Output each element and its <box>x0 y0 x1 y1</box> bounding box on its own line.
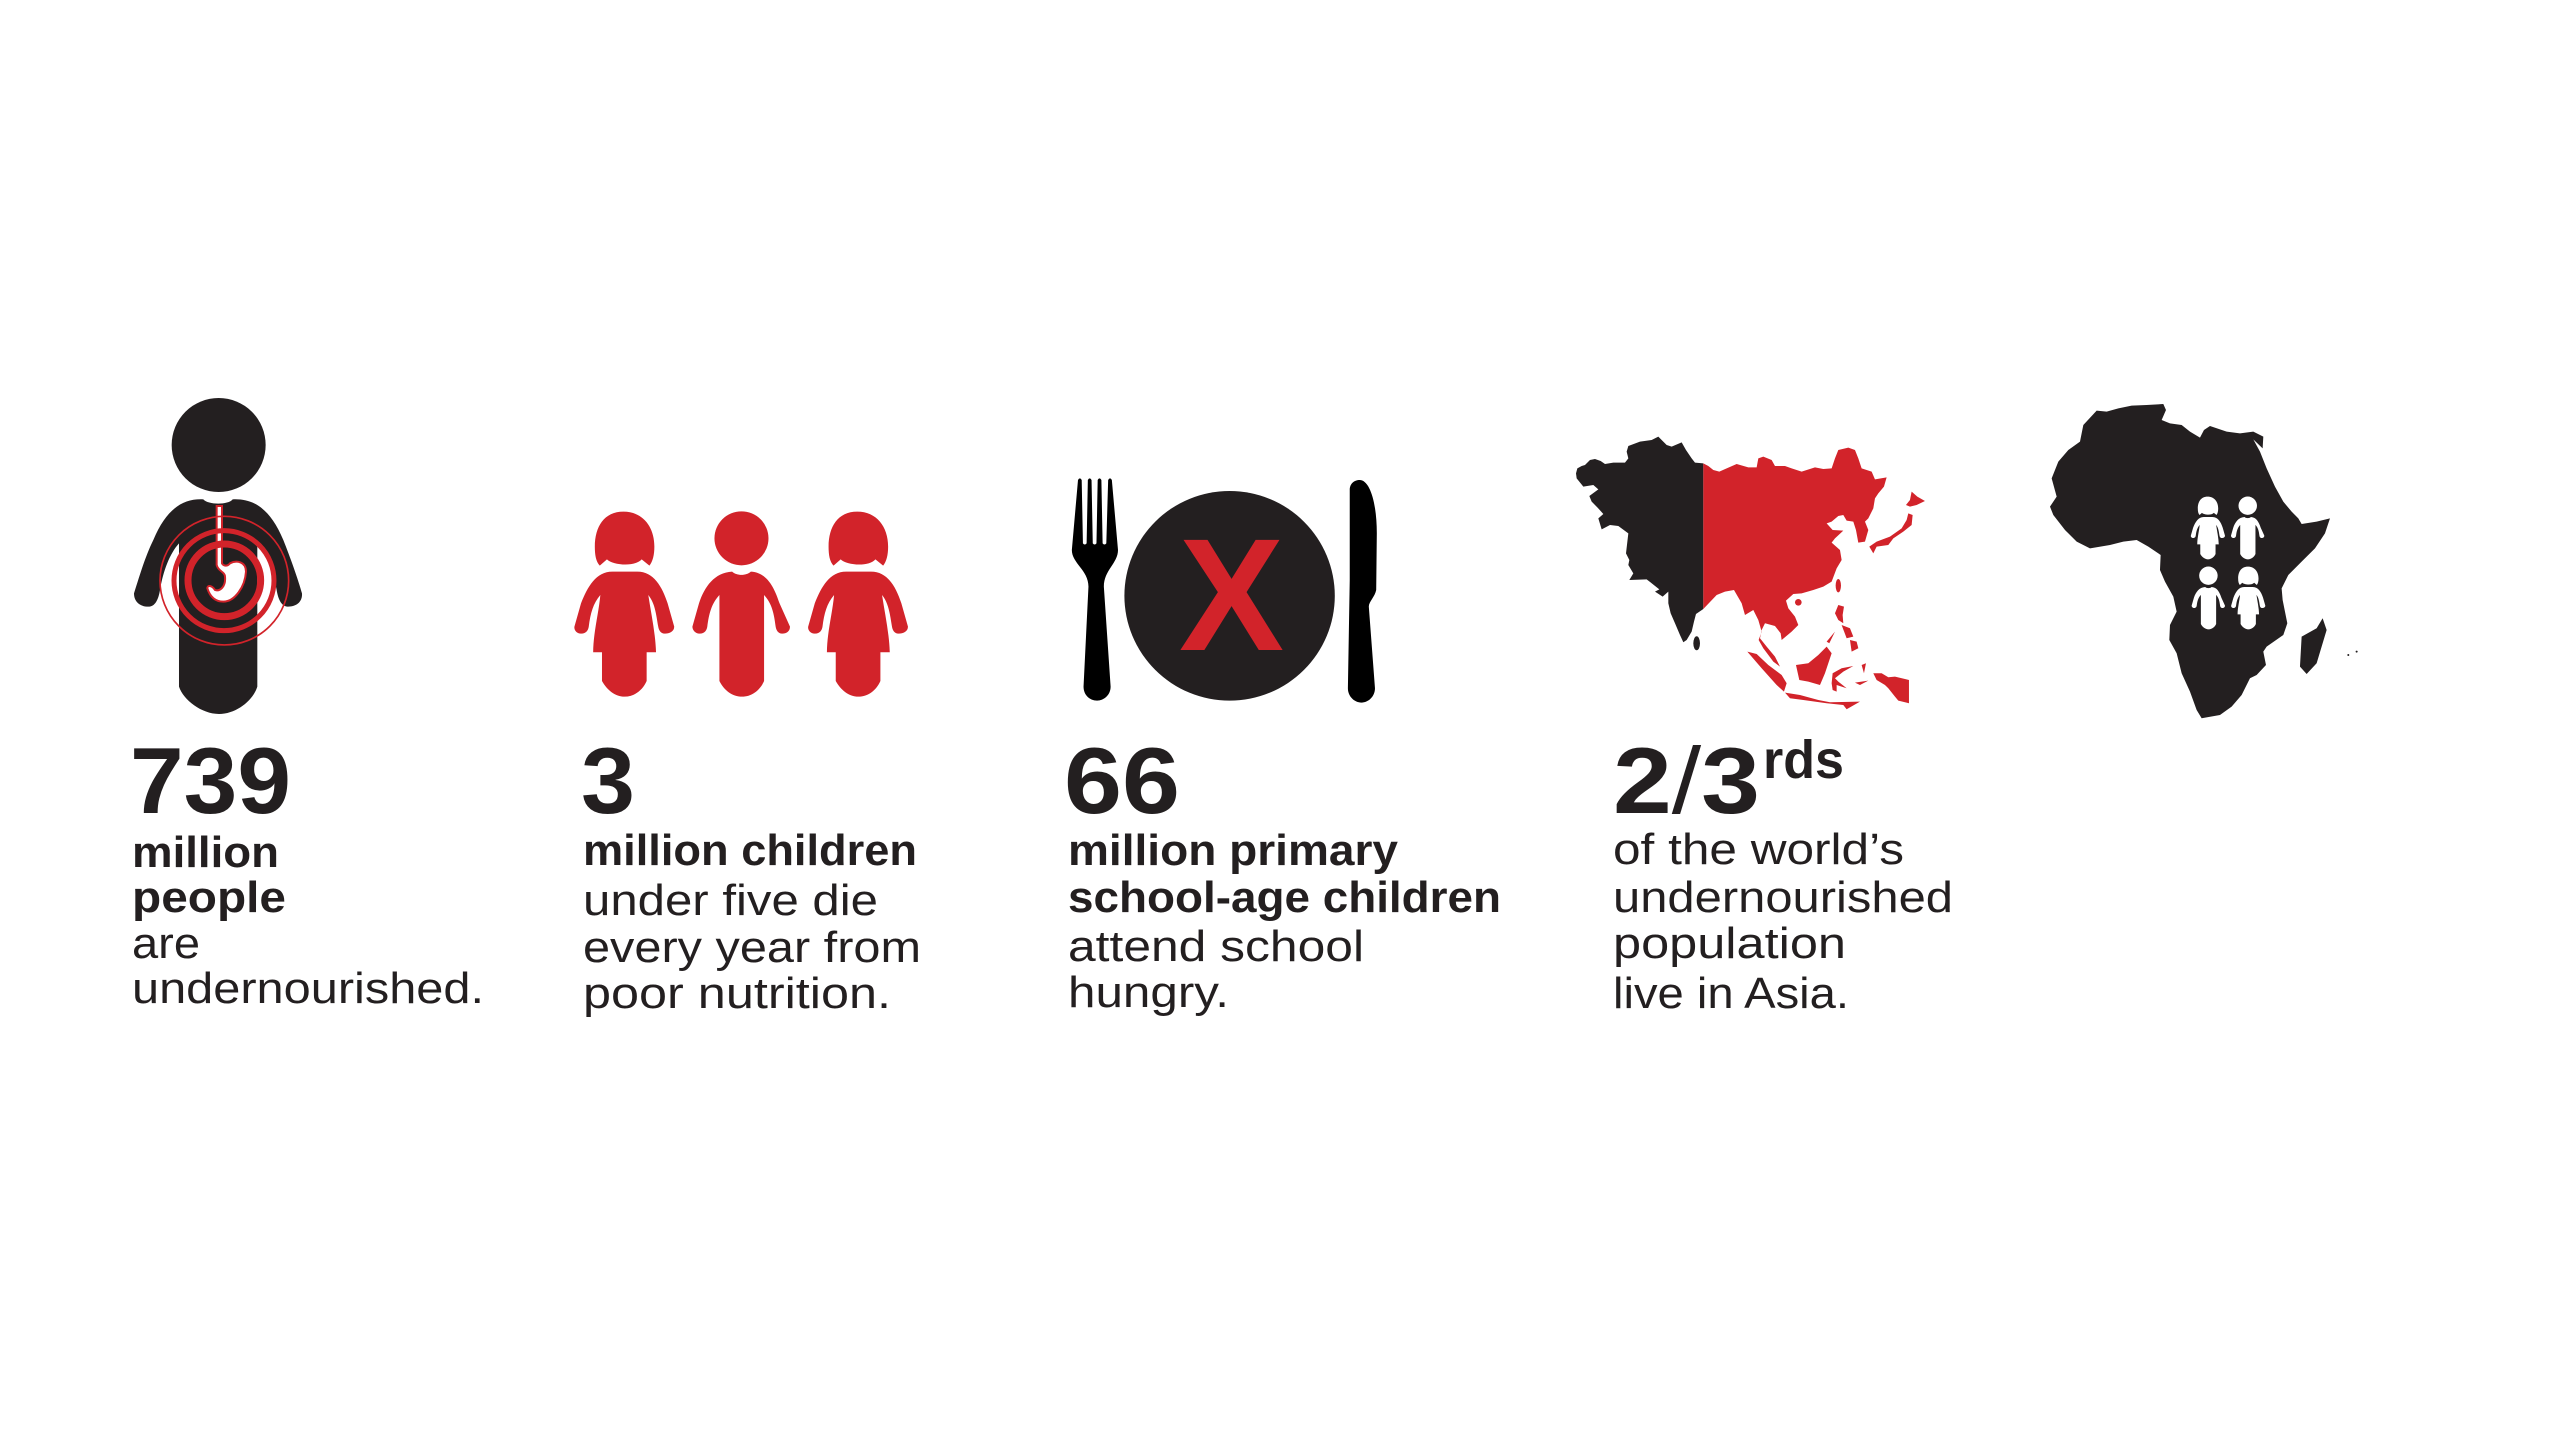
panel: 66 million primary school-age children <box>1064 478 1501 1017</box>
text block: of the world's undernourished population live in Asia: undernourished <box>1613 873 1953 922</box>
icon: four white children <box>2191 497 2265 629</box>
map: Asia split black and red <box>1576 437 1925 709</box>
map: Africa silhouette <box>2050 404 2358 718</box>
icon: person with hungry stomach <box>134 398 302 714</box>
map: Africa with four white children <box>2050 404 2358 718</box>
map: eastern Asia in red <box>1703 448 1925 709</box>
text block: attend school hungry: hungry. <box>1068 968 1229 1017</box>
text block: million children under five die: million children <box>583 826 917 875</box>
text block: million children under five die: every year from <box>583 923 921 972</box>
text block: attend school hungry: attend school <box>1068 922 1364 971</box>
icon: red X: X <box>1179 505 1284 684</box>
text block: of the world's undernourished population live in Asia <box>1613 825 1953 1018</box>
text block: million children under five die: poor nutrition. <box>583 969 891 1018</box>
text block: attend school hungry <box>1068 826 1501 1017</box>
text block: attend school hungry: school-age children <box>1068 873 1501 922</box>
icon: fork, plate and knife <box>1072 478 1377 703</box>
number: 66: 66 <box>1064 728 1180 833</box>
text block: million children under five die: under five die <box>583 876 878 925</box>
text block: of the world's undernourished population live in Asia: of the world’s <box>1613 825 1904 874</box>
icon: plate <box>1124 491 1335 701</box>
text block: million people are undernourished <box>132 828 484 1013</box>
text block: of the world's undernourished population live in Asia: live in Asia. <box>1613 969 1849 1018</box>
text block: of the world's undernourished population live in Asia: population <box>1613 919 1846 968</box>
number: 2/3rds <box>1613 728 1844 833</box>
icon: fork <box>1072 478 1118 701</box>
text block: million people are undernourished: undernourished. <box>132 964 484 1013</box>
text block: million people are undernourished: million <box>132 828 279 877</box>
panel: 2/3rds live in Asia, plus Africa <box>1576 404 2358 1018</box>
icon: knife <box>1348 480 1377 703</box>
panel: 3 million children <box>574 511 921 1018</box>
text block: million children under five die <box>583 826 921 1018</box>
icon: three children <box>574 511 908 697</box>
text block: attend school hungry: million primary <box>1068 826 1399 875</box>
map: western Asia in black <box>1576 437 1703 650</box>
number: 3: 3 <box>581 728 635 833</box>
number: 2/3rds: rds <box>1763 730 1844 790</box>
text block: million people are undernourished: people <box>132 873 286 922</box>
number: 2/3rds: 2/3 <box>1613 728 1760 833</box>
panel: 739 million people <box>130 398 484 1013</box>
number: 739: 739 <box>130 728 291 833</box>
text block: million people are undernourished: are <box>132 919 200 968</box>
